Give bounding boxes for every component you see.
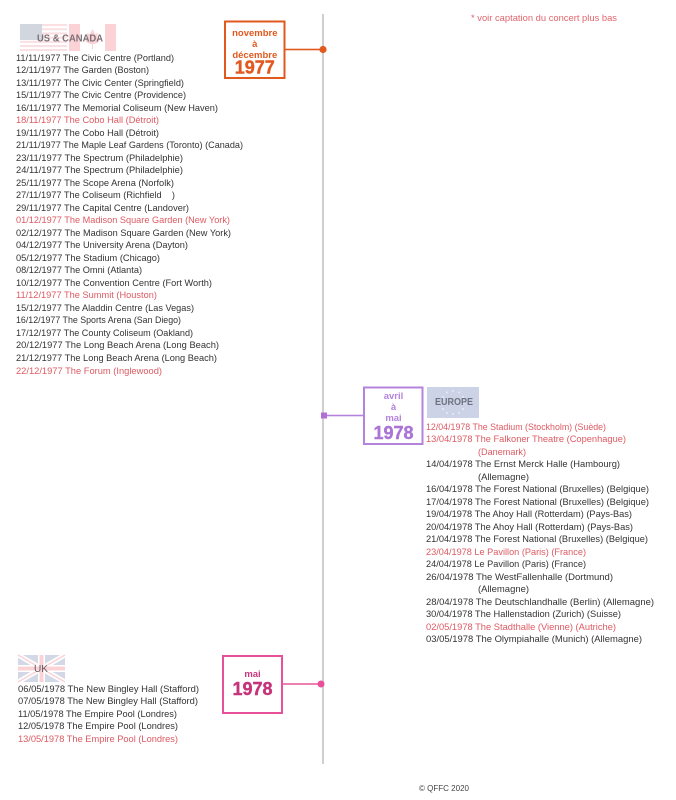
- concert list: US & Canada: 20/12/1977 The Long Beach Arena (Long Beach): [16, 340, 219, 351]
- concert list: UK: 07/05/1978 The New Bingley Hall (Stafford): [18, 696, 198, 707]
- concert list: Europe: 23/04/1978 Le Pavillon (Paris) (France): [426, 547, 586, 558]
- concert list: Europe: 26/04/1978 The WestFallenhalle (Dortmund): [426, 572, 613, 583]
- concert list: US & Canada: 24/11/1977 The Spectrum (Philadelphie): [16, 165, 183, 176]
- concert list: US & Canada: 08/12/1977 The Omni (Atlanta): [16, 265, 142, 276]
- concert list: Europe: 28/04/1978 The Deutschlandhalle (Berlin) (Allemagne): [426, 597, 654, 608]
- concert list: US & Canada: 15/12/1977 The Aladdin Centre (Las Vegas): [16, 303, 194, 314]
- concert list: US & Canada: 16/12/1977 The Sports Arena (San Diego): [16, 315, 181, 326]
- period marker: avril à mai 1978: avril: [384, 391, 403, 402]
- concert list: US & Canada: 27/11/1977 The Coliseum (Richfield ): [16, 190, 175, 201]
- period marker: avril à mai 1978: mai: [385, 413, 402, 424]
- concert list: Europe: 13/04/1978 The Falkoner Theatre (Copenhague): [426, 434, 626, 445]
- period marker: novembre à décembre 1977: 1977: [235, 58, 275, 78]
- concert list: US & Canada: 15/11/1977 The Civic Centre (Providence): [16, 90, 186, 101]
- concert list: Europe: 17/04/1978 The Forest National (Bruxelles) (Belgique): [426, 497, 649, 508]
- concert list: US & Canada: 13/11/1977 The Civic Center (Springfield): [16, 78, 184, 89]
- concert list: US & Canada: 21/11/1977 The Maple Leaf Gardens (Toronto) (Canada): [16, 140, 243, 151]
- period marker: novembre à décembre 1977: [225, 22, 327, 78]
- concert list: US & Canada: 02/12/1977 The Madison Square Garden (New York): [16, 228, 231, 239]
- concert list: US & Canada: 16/11/1977 The Memorial Coliseum (New Haven): [16, 103, 218, 114]
- concert list: Europe: 20/04/1978 The Ahoy Hall (Rotterdam) (Pays-Bas): [426, 522, 633, 533]
- concert list: Europe: (Danemark): [478, 447, 526, 458]
- concert list: Europe: 02/05/1978 The Stadthalle (Vienne) (Autriche): [426, 622, 616, 633]
- flag heading: Europe: [427, 387, 479, 418]
- timeline axis: [322, 14, 324, 764]
- concert list: Europe: 16/04/1978 The Forest National (Bruxelles) (Belgique): [426, 484, 649, 495]
- concert list: US & Canada: 18/11/1977 The Cobo Hall (Détroit): [16, 115, 159, 126]
- period marker: novembre à décembre 1977: novembre: [232, 28, 278, 39]
- concert list: Europe: 19/04/1978 The Ahoy Hall (Rotterdam) (Pays-Bas): [426, 509, 632, 520]
- concert list: Europe: 14/04/1978 The Ernst Merck Halle (Hambourg): [426, 459, 620, 470]
- concert list: US & Canada: 29/11/1977 The Capital Centre (Landover): [16, 203, 189, 214]
- flag heading: US & Canada: US & CANADA: [37, 34, 103, 44]
- period marker: mai 1978: mai: [244, 669, 261, 680]
- concert list: US & Canada: 10/12/1977 The Convention Centre (Fort Worth): [16, 278, 212, 289]
- concert list: US & Canada: 19/11/1977 The Cobo Hall (Détroit): [16, 128, 159, 139]
- concert list: US & Canada: 01/12/1977 The Madison Square Garden (New York): [16, 215, 230, 226]
- flag heading: UK: UK: [34, 664, 48, 675]
- period marker: avril à mai 1978: à: [391, 402, 397, 413]
- period marker: mai 1978: 1978: [232, 679, 273, 699]
- concert list: Europe: (Allemagne): [478, 472, 529, 483]
- concert list: Europe: 12/04/1978 The Stadium (Stockholm) (Suède): [426, 422, 606, 433]
- footnote: * voir captation du concert plus bas: [471, 13, 617, 24]
- flag heading: US & Canada: [20, 24, 116, 51]
- concert list: Europe: 03/05/1978 The Olympiahalle (Munich) (Allemagne): [426, 634, 642, 645]
- concert list: US & Canada: 04/12/1977 The University Arena (Dayton): [16, 240, 188, 251]
- concert list: Europe: (Allemagne): [478, 584, 529, 595]
- concert list: US & Canada: 22/12/1977 The Forum (Inglewood): [16, 366, 162, 377]
- concert list: US & Canada: [16, 53, 243, 377]
- concert list: US & Canada: 21/12/1977 The Long Beach Arena (Long Beach): [16, 353, 217, 364]
- period marker: avril à mai 1978: [321, 388, 422, 444]
- concert list: UK: 13/05/1978 The Empire Pool (Londres): [18, 734, 178, 745]
- concert list: Europe: [426, 422, 654, 645]
- period marker: novembre à décembre 1977: à: [252, 39, 258, 50]
- concert list: US & Canada: 05/12/1977 The Stadium (Chicago): [16, 253, 160, 264]
- concert list: Europe: 30/04/1978 The Hallenstadion (Zurich) (Suisse): [426, 609, 621, 620]
- flag heading: Europe: EUROPE: [435, 397, 473, 408]
- concert list: US & Canada: 17/12/1977 The County Coliseum (Oakland): [16, 328, 193, 339]
- flag heading: UK: [18, 655, 65, 682]
- concert list: Europe: 21/04/1978 The Forest National (Bruxelles) (Belgique): [426, 534, 648, 545]
- concert list: US & Canada: 11/12/1977 The Summit (Houston): [16, 290, 157, 301]
- concert list: UK: 12/05/1978 The Empire Pool (Londres): [18, 721, 178, 732]
- concert list: US & Canada: 25/11/1977 The Scope Arena (Norfolk): [16, 178, 174, 189]
- concert list: UK: 06/05/1978 The New Bingley Hall (Stafford): [18, 684, 199, 695]
- copyright: © QFFC 2020: [419, 784, 470, 793]
- period marker: mai 1978: [223, 656, 324, 713]
- concert list: US & Canada: 12/11/1977 The Garden (Boston): [16, 65, 149, 76]
- concert list: Europe: 24/04/1978 Le Pavillon (Paris) (France): [426, 559, 586, 570]
- concert list: UK: 11/05/1978 The Empire Pool (Londres): [18, 709, 177, 720]
- concert list: US & Canada: 23/11/1977 The Spectrum (Philadelphie): [16, 153, 183, 164]
- concert list: UK: [18, 684, 199, 745]
- period marker: avril à mai 1978: 1978: [373, 423, 414, 443]
- period marker: novembre à décembre 1977: décembre: [232, 50, 277, 61]
- concert list: US & Canada: 11/11/1977 The Civic Centre (Portland): [16, 53, 174, 64]
